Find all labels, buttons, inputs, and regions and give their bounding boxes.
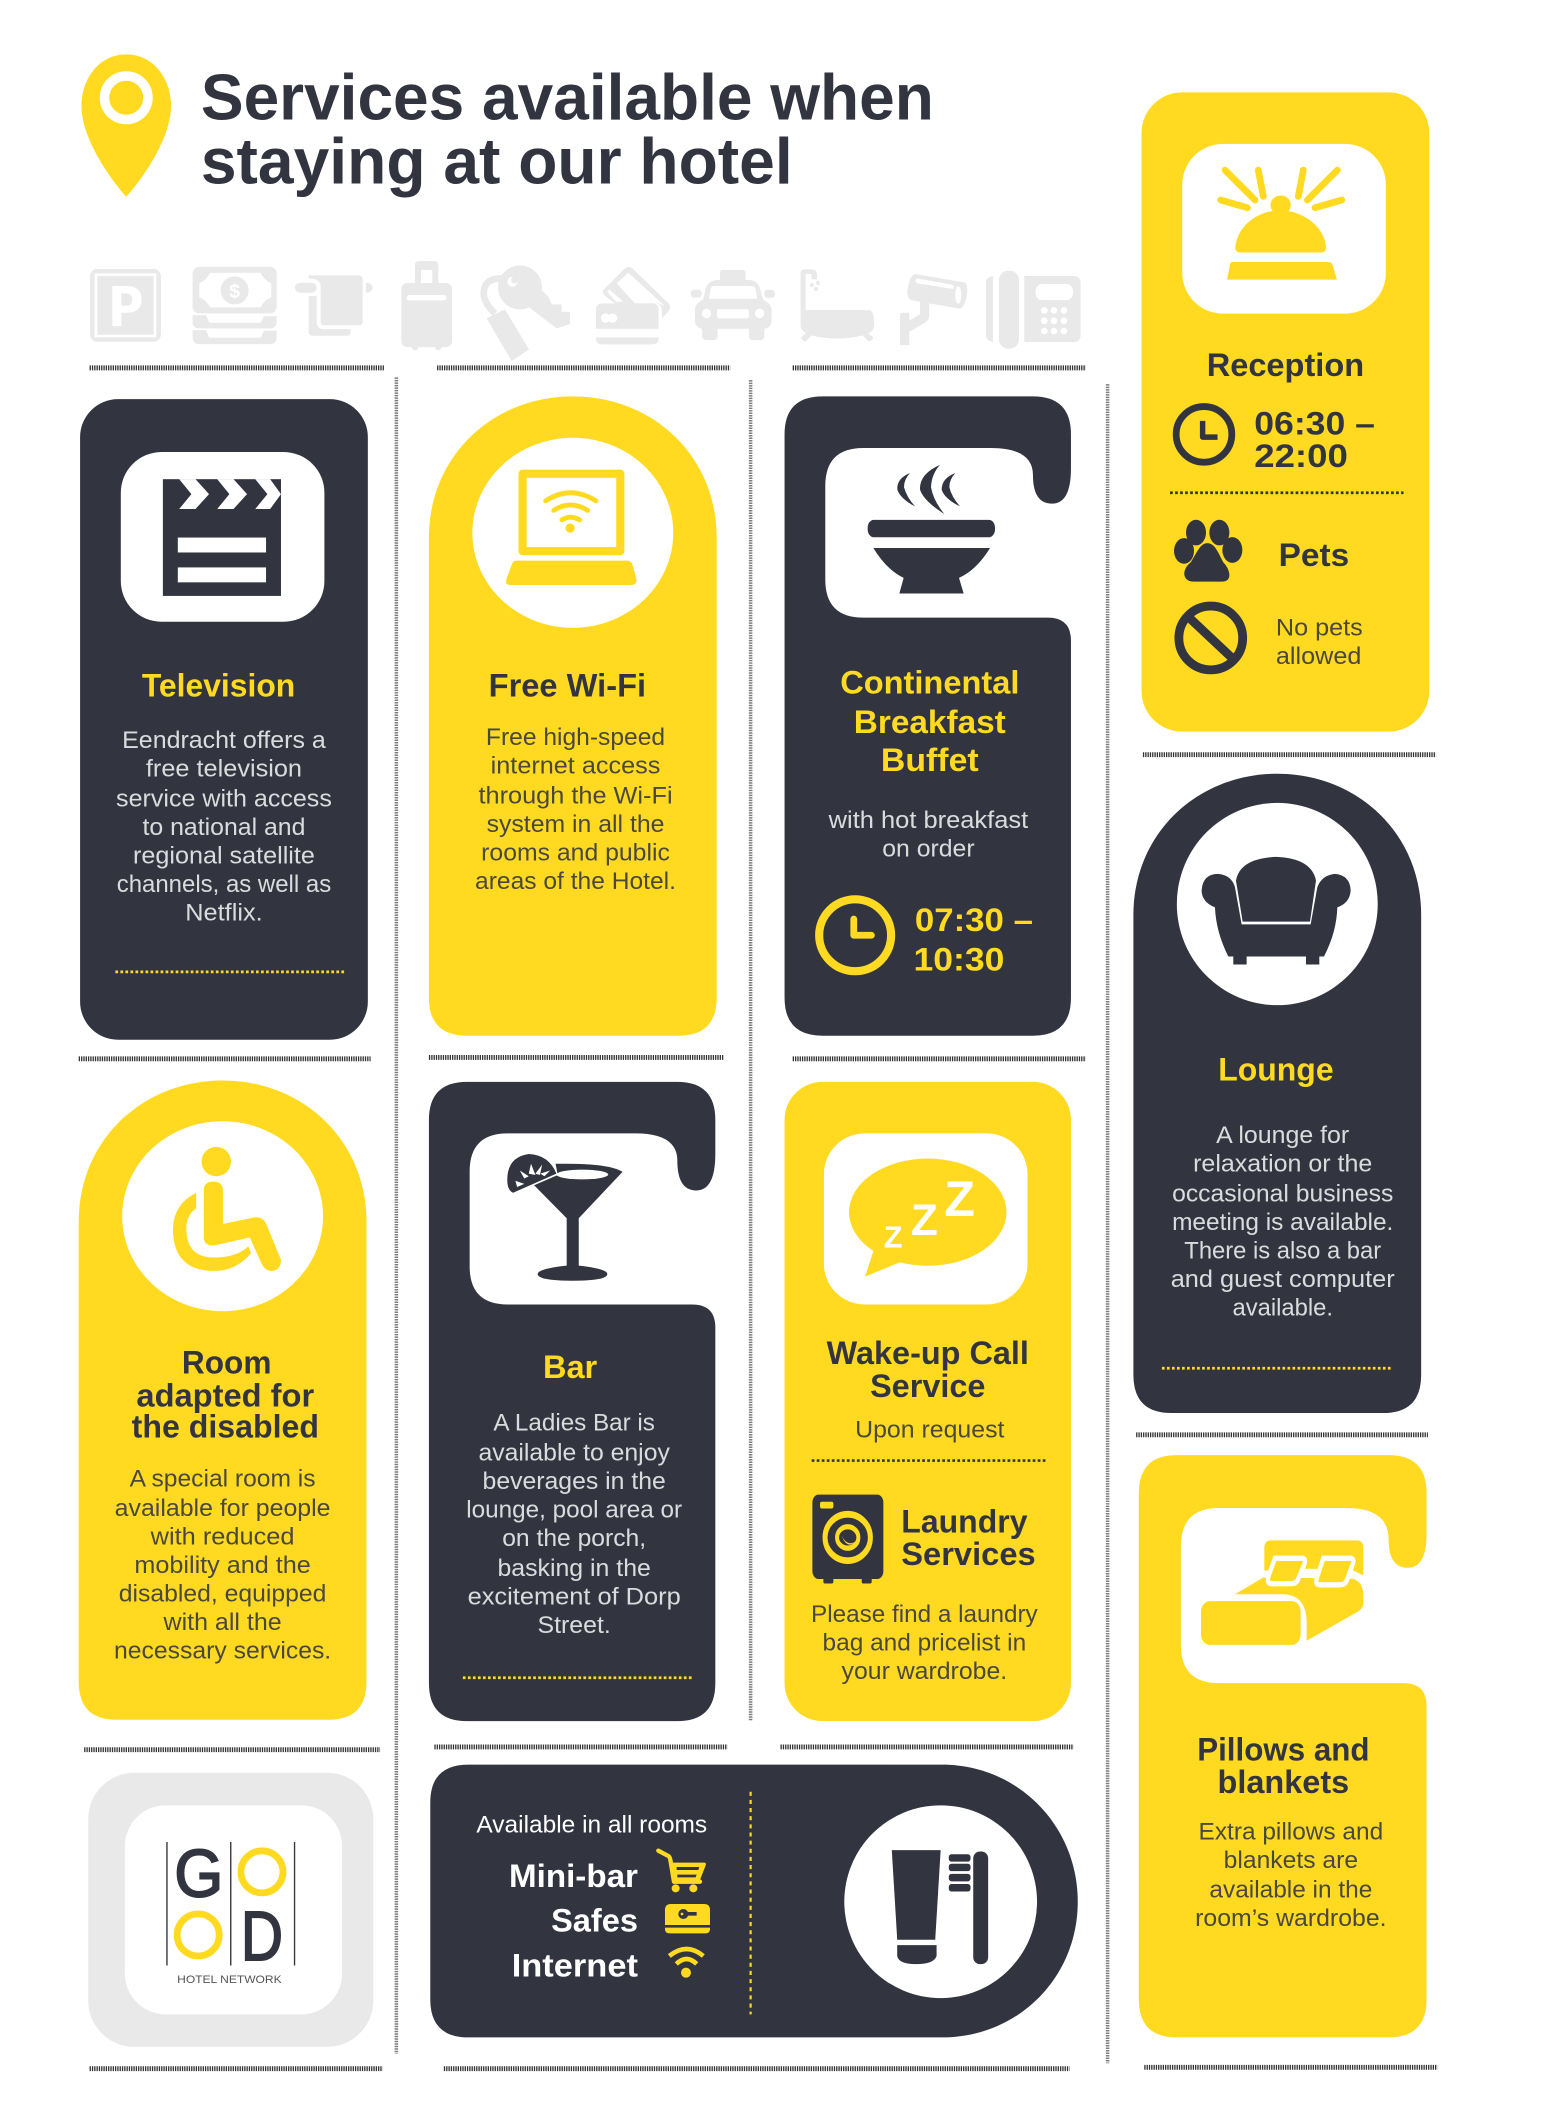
icon: key and tag <box>484 265 570 361</box>
heading: continental breakfast buffet <box>840 665 1019 778</box>
heading: bar: Bar <box>543 1349 598 1385</box>
heading: pillows and blankets: blankets <box>1218 1764 1349 1800</box>
text: pillows description <box>1195 1818 1387 1932</box>
heading: free wi-fi: Free Wi-Fi <box>489 667 646 703</box>
icon: speech bubble zzz: Z <box>884 1220 902 1254</box>
text: television description <box>116 727 332 926</box>
icon: clock yellow <box>819 899 891 971</box>
heading: wake-up call service: Wake-up Call <box>827 1335 1029 1371</box>
text: pillows description: room’s wardrobe. <box>1195 1905 1387 1932</box>
title: Services available when <box>201 60 934 133</box>
panel: room adapted for the disabled <box>79 1080 366 1720</box>
text: lounge description <box>1171 1122 1395 1321</box>
list: room amenities: Mini-bar <box>509 1858 638 1894</box>
heading: continental breakfast buffet: Continental <box>840 665 1019 701</box>
icon: security camera <box>900 274 967 345</box>
icon: speech bubble zzz: Z <box>944 1171 975 1227</box>
panel: good hotel network logo <box>88 1773 373 2047</box>
heading: reception: Reception <box>1207 347 1364 383</box>
heading: television: Television <box>142 667 295 703</box>
panel: available in all rooms <box>430 1765 1078 2037</box>
text: room description: necessary services. <box>114 1638 331 1665</box>
text: bar description: basking in the <box>497 1555 651 1582</box>
text: no pets allowed: No pets <box>1276 614 1363 641</box>
text: lounge description: and guest computer <box>1171 1266 1395 1293</box>
text: reception hours <box>1254 405 1375 474</box>
text: lounge description: relaxation or the <box>1193 1150 1372 1177</box>
panel: lounge <box>1133 774 1421 1413</box>
text: lounge description: A lounge for <box>1216 1122 1349 1149</box>
text: laundry description: Please find a laundry <box>811 1601 1038 1628</box>
text: television description: Netflix. <box>185 899 263 926</box>
text: television description: to national and <box>143 814 305 841</box>
text: room description: with all the <box>163 1609 282 1636</box>
icon: wheelchair <box>173 1147 281 1271</box>
text: pillows description: Extra pillows and <box>1199 1818 1383 1845</box>
text: bar description <box>466 1410 682 1639</box>
logo: good: D <box>241 1897 283 1975</box>
logo: good: G <box>174 1837 223 1911</box>
panel: free wi-fi <box>429 396 717 1036</box>
icon: armchair <box>1202 857 1351 965</box>
text: room description: disabled, equipped <box>119 1581 326 1608</box>
panel: continental breakfast buffet <box>785 396 1071 1036</box>
text: room description: A special room is <box>130 1465 316 1492</box>
text: lounge description: meeting is available. <box>1172 1209 1393 1236</box>
icon: paw <box>1174 520 1242 582</box>
list: room amenities <box>509 1858 638 1983</box>
text: television description: Eendracht offers a <box>122 727 326 754</box>
text: bar description: excitement of Dorp <box>468 1583 681 1610</box>
heading: continental breakfast buffet: Buffet <box>881 742 979 778</box>
icon: prohibited sign <box>1179 606 1243 670</box>
grey service icon strip <box>90 261 1081 361</box>
text: no pets allowed: allowed <box>1276 643 1361 670</box>
heading: pillows and blankets: Pillows and <box>1197 1732 1370 1768</box>
heading: laundry services <box>901 1503 1036 1572</box>
panel: bar <box>429 1082 715 1721</box>
text: lounge description: available. <box>1232 1294 1333 1321</box>
text: reception hours: 22:00 <box>1254 438 1348 474</box>
heading: room adapted for the disabled: adapted for <box>136 1377 315 1413</box>
icon: reception bell <box>1221 170 1342 280</box>
text: breakfast hours: 07:30 – <box>915 902 1033 938</box>
heading: lounge: Lounge <box>1218 1051 1334 1087</box>
icon: laptop with wi-fi <box>506 470 637 585</box>
heading: room adapted for the disabled: Room <box>182 1345 271 1381</box>
text: breakfast note <box>828 807 1028 863</box>
icon: small wi-fi <box>669 1949 703 1978</box>
icon: clapperboard <box>163 479 281 596</box>
text: television description: free television <box>146 755 302 782</box>
text: television description: channels, as well as <box>117 871 331 898</box>
text: laundry description <box>811 1601 1038 1685</box>
icon: pillows and glasses <box>1201 1540 1363 1645</box>
icon: credit cards <box>596 267 670 344</box>
text: room description <box>114 1465 331 1665</box>
icon: safe <box>665 1904 710 1933</box>
text: room description: mobility and the <box>134 1552 311 1579</box>
text: breakfast note: on order <box>882 836 975 863</box>
text: bar description: available to enjoy <box>478 1440 671 1467</box>
icon: clock dark <box>1176 407 1232 462</box>
panel: television <box>80 399 368 1040</box>
text: breakfast note: with hot breakfast <box>828 807 1028 834</box>
text: bar description: A Ladies Bar is <box>493 1410 655 1437</box>
text: laundry description: your wardrobe. <box>842 1658 1007 1685</box>
text: bar description: beverages in the <box>483 1468 666 1495</box>
text: wi-fi description: through the Wi-Fi <box>478 783 673 810</box>
panel: reception and pets <box>1142 92 1429 732</box>
text: bar description: Street. <box>538 1612 611 1639</box>
heading: laundry services: Laundry <box>901 1503 1028 1539</box>
text: bar description: lounge, pool area or <box>466 1497 682 1524</box>
heading: wake-up call service: Service <box>870 1368 985 1404</box>
text: laundry description: bag and pricelist in <box>823 1630 1026 1657</box>
heading: continental breakfast buffet: Breakfast <box>854 704 1006 740</box>
icon: money <box>193 267 277 344</box>
icon: speech bubble zzz <box>849 1159 1006 1277</box>
icon: towel <box>295 275 373 336</box>
icon: cocktail glass <box>507 1154 623 1281</box>
heading: pets: Pets <box>1279 537 1349 573</box>
icon: speech bubble zzz: Z <box>911 1196 938 1245</box>
title: staying at our hotel <box>201 124 793 197</box>
text: breakfast hours: 10:30 <box>914 942 1004 978</box>
heading: room adapted for the disabled <box>132 1345 319 1444</box>
list: room amenities: Safes <box>551 1903 638 1939</box>
icon: parking <box>90 269 161 342</box>
text: wi-fi description: Free high-speed <box>486 724 665 751</box>
heading: room adapted for the disabled: the disabled <box>132 1408 319 1444</box>
heading: wake-up call service <box>827 1335 1029 1404</box>
text: no pets allowed <box>1276 614 1363 670</box>
text: available in all rooms: Available in all rooms <box>476 1811 707 1838</box>
panel: wake-up call and laundry <box>785 1082 1071 1721</box>
icon: taxi <box>691 270 775 340</box>
text: lounge description: There is also a bar <box>1184 1237 1381 1264</box>
icon: money: $ <box>229 281 240 302</box>
icon: toothpaste and toothbrush <box>892 1850 988 1964</box>
text: upon request: Upon request <box>855 1416 1005 1443</box>
text: pillows description: blankets are <box>1224 1847 1358 1874</box>
location pin icon <box>81 54 171 197</box>
panel: pillows and blankets <box>1139 1455 1427 2037</box>
heading: laundry services: Services <box>901 1536 1036 1572</box>
text: television description: regional satellite <box>133 842 315 869</box>
title <box>201 60 934 197</box>
text: bar description: on the porch, <box>502 1525 646 1552</box>
text: room description: with reduced <box>150 1524 295 1551</box>
icon: soup bowl <box>868 465 995 593</box>
icon: telephone <box>986 271 1081 349</box>
text: wi-fi description: internet access <box>491 753 660 780</box>
text: reception hours: 06:30 – <box>1254 405 1375 441</box>
text: pillows description: available in the <box>1209 1877 1372 1904</box>
icon: washing machine <box>812 1495 883 1583</box>
text: wi-fi description: areas of the Hotel. <box>475 868 676 895</box>
text: lounge description: occasional business <box>1172 1180 1393 1207</box>
icon: shopping cart <box>658 1851 706 1892</box>
logo: good: HOTEL NETWORK <box>177 1974 282 1986</box>
text: wi-fi description: rooms and public <box>481 840 670 867</box>
heading: pillows and blankets <box>1197 1732 1370 1800</box>
text: room description: available for people <box>115 1495 331 1522</box>
list: room amenities: Internet <box>512 1947 638 1983</box>
icon: bathtub <box>801 269 874 341</box>
icon: luggage <box>401 261 452 350</box>
text: television description: service with access <box>116 785 332 812</box>
text: wi-fi description: system in all the <box>487 811 664 838</box>
text: breakfast hours <box>914 902 1033 978</box>
logo: good <box>167 1837 295 1986</box>
text: wi-fi description <box>475 724 676 895</box>
